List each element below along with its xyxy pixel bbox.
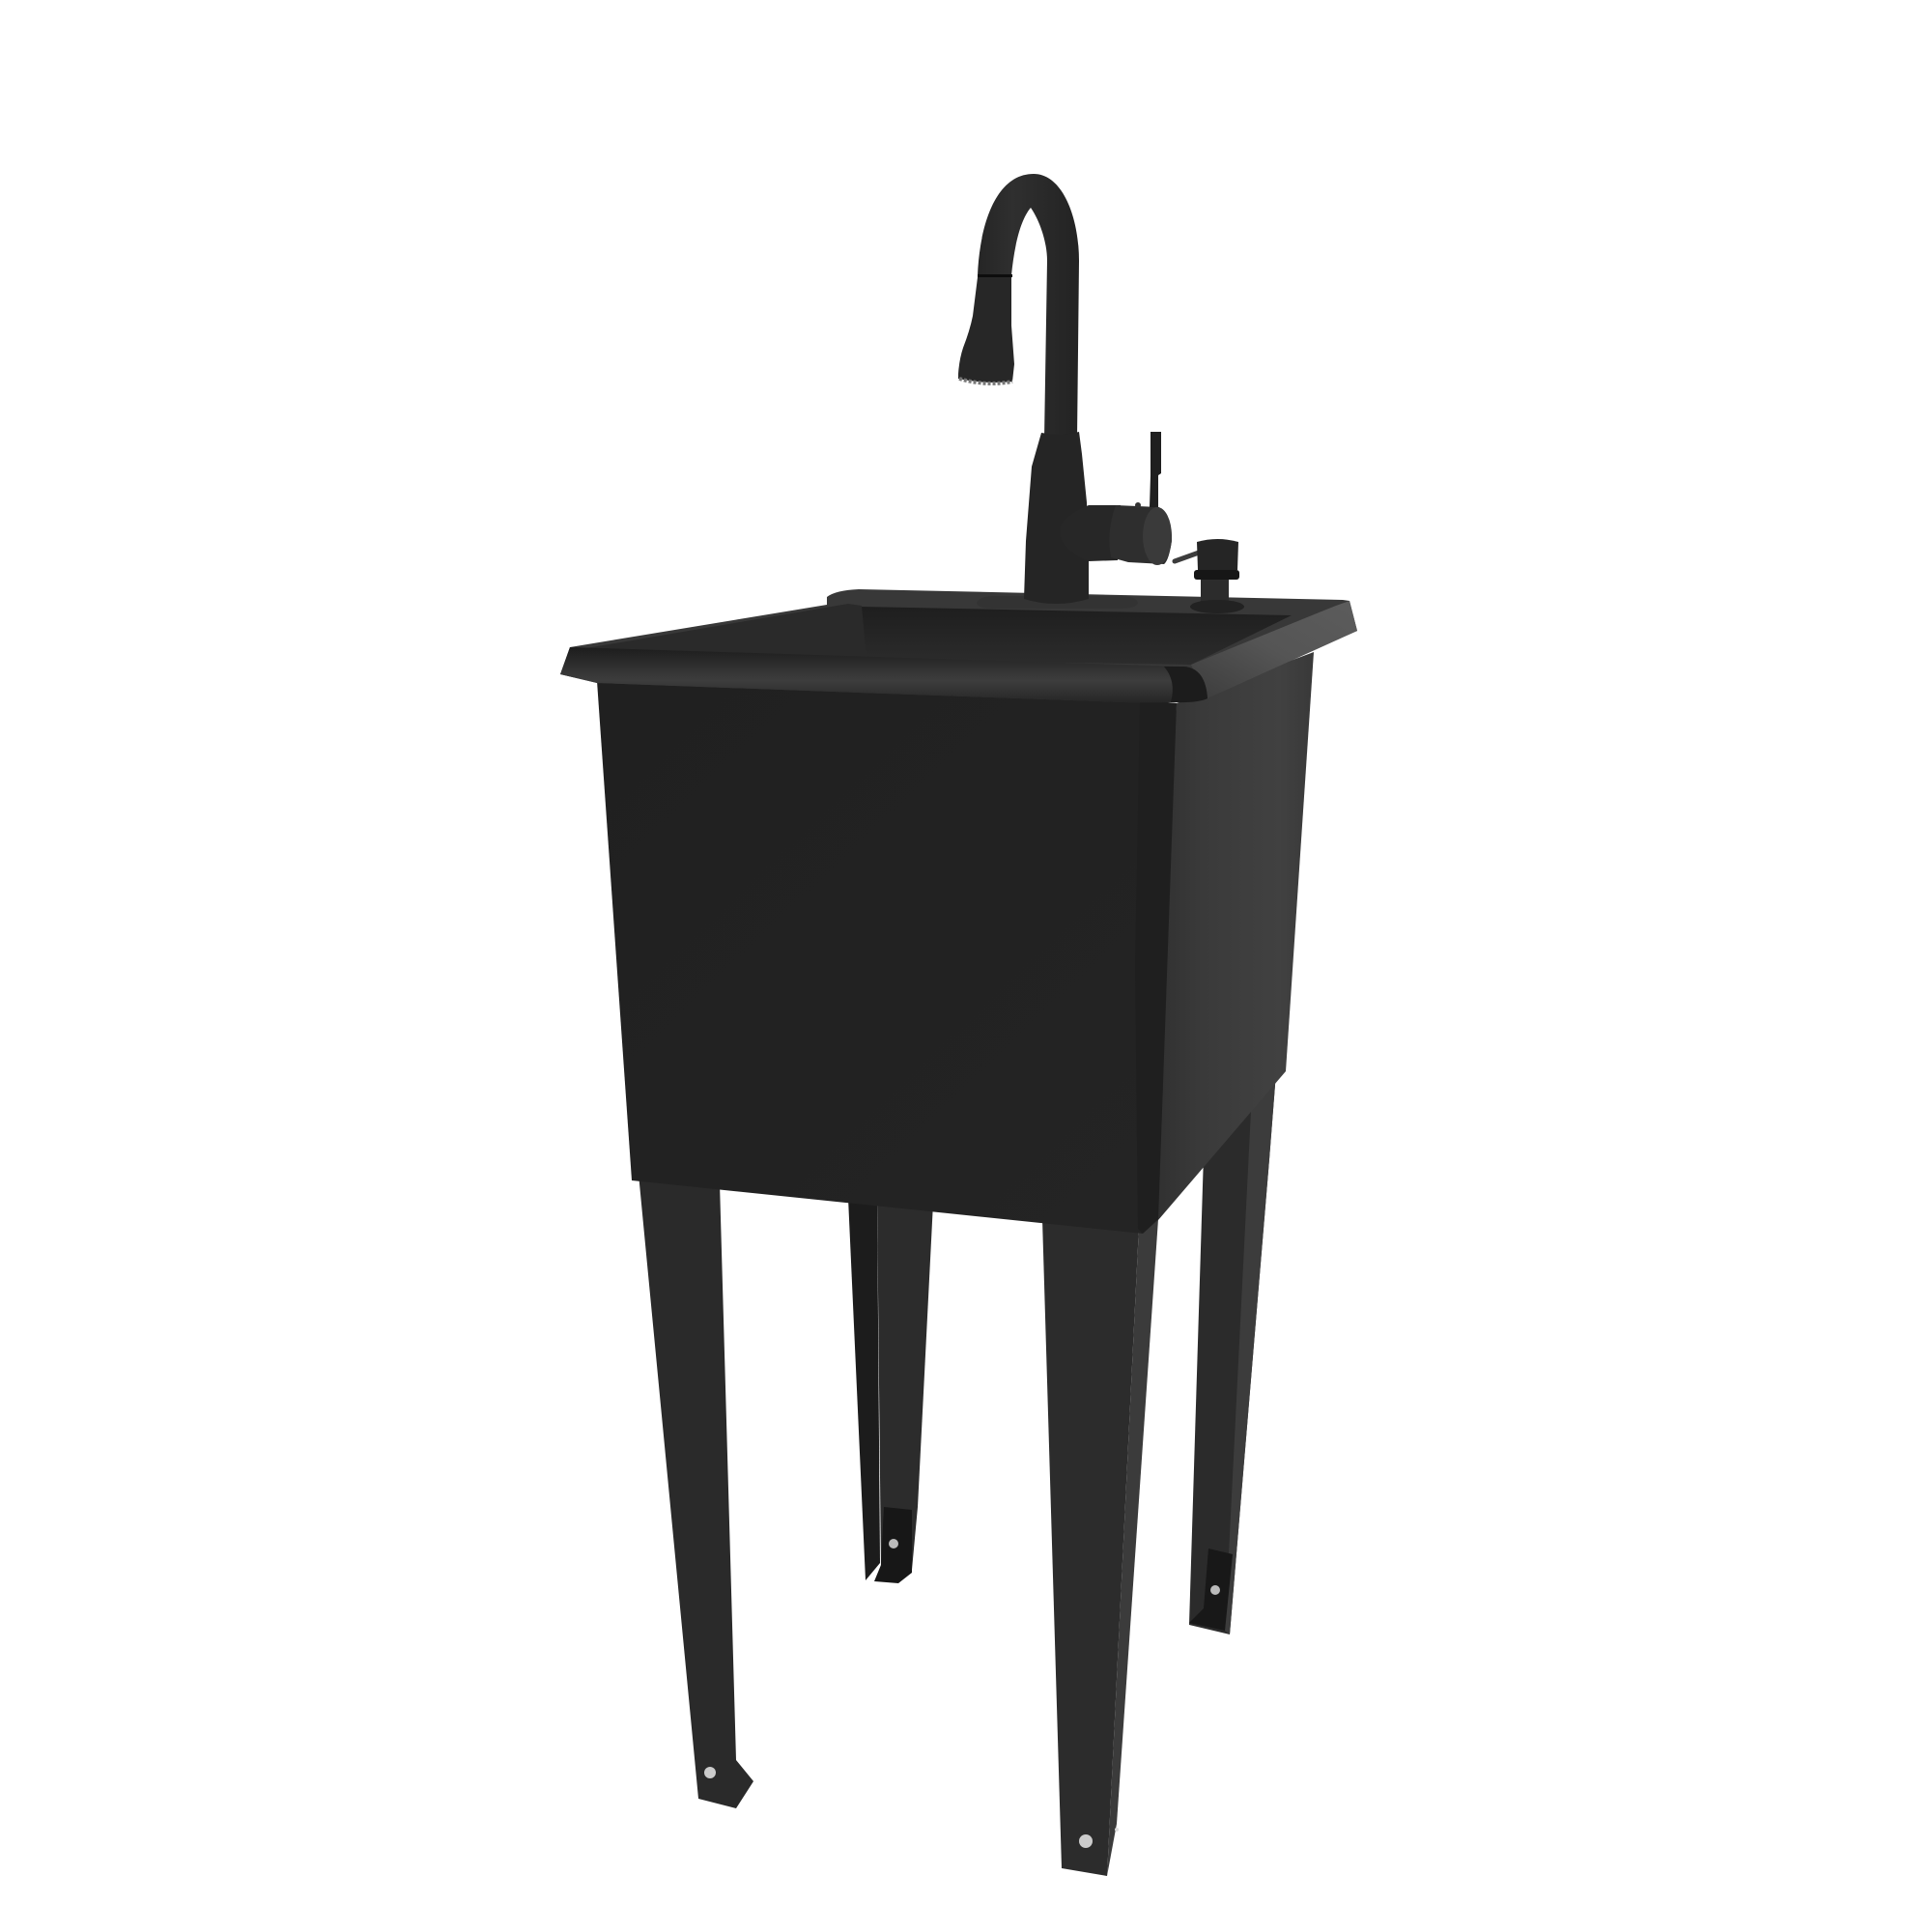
handle button	[1135, 502, 1141, 508]
tub front face	[597, 681, 1177, 1234]
pull-down sprayer	[958, 277, 1014, 383]
rim outline	[560, 589, 1357, 702]
handle cap	[1109, 505, 1172, 564]
faucet	[958, 174, 1172, 609]
basin left wall	[580, 604, 867, 658]
basin back wall	[862, 607, 1292, 665]
sink tub body	[597, 652, 1314, 1234]
handle body	[1060, 505, 1121, 561]
tub right side	[1143, 652, 1314, 1234]
handle lever	[1150, 432, 1161, 507]
back right leg	[1189, 1072, 1276, 1634]
deck plate	[977, 596, 1138, 609]
tub corner band	[1135, 701, 1177, 1234]
front right leg	[1042, 1219, 1158, 1876]
front left leg	[639, 1174, 753, 1808]
back left leg	[848, 1198, 933, 1583]
faucet gooseneck	[978, 174, 1079, 440]
faucet base	[1024, 432, 1089, 604]
sprayer nozzle	[959, 379, 1012, 384]
sprayer collar	[978, 274, 1012, 277]
sink rim and basin	[560, 589, 1357, 702]
front rim corner	[1164, 667, 1208, 702]
right rim band	[1191, 601, 1357, 698]
front rim band	[560, 647, 1208, 702]
soap dispenser	[1175, 539, 1244, 613]
